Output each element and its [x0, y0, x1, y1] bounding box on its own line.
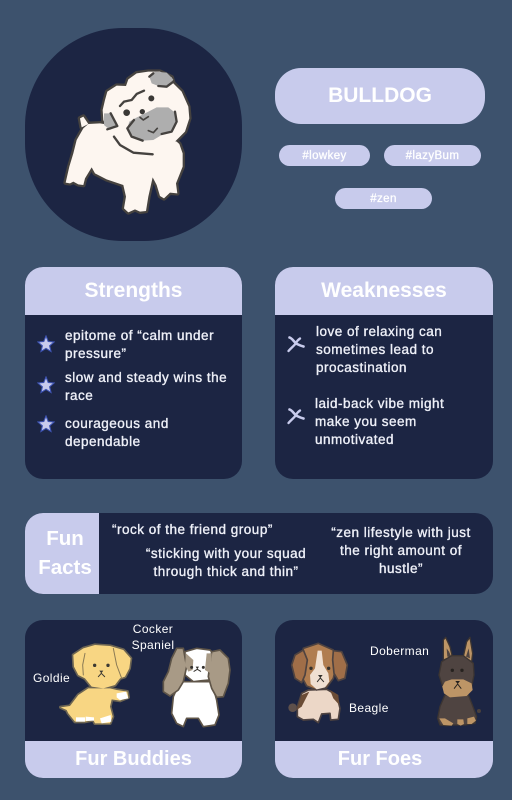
heading: weaknesses — [275, 267, 493, 315]
fact 3: “zen lifestyle with just — [331, 525, 471, 540]
heading: fur foes: Fur Foes — [338, 748, 422, 770]
icon: bulldog — [63, 69, 192, 215]
weakness 1: love of relaxing can — [316, 324, 442, 339]
heading: fur buddies — [25, 741, 242, 778]
icon: cross 2 — [287, 408, 305, 424]
icon: cocker spaniel — [162, 648, 231, 728]
strength 2: slow and steady wins the — [65, 370, 227, 385]
icon: doberman — [437, 636, 481, 726]
strength 2 — [65, 370, 227, 403]
tag: zen: #zen — [370, 193, 397, 205]
tag: lowkey: #lowkey — [302, 150, 347, 162]
hero panel: bulldog portrait — [25, 28, 242, 241]
weakness 2: laid-back vibe might — [315, 396, 444, 411]
fact 3: the right amount of — [340, 543, 462, 558]
heading: strengths: Strengths — [84, 279, 182, 302]
title pill — [275, 68, 485, 124]
heading: strengths — [25, 267, 242, 315]
strength 3: courageous and — [65, 416, 169, 431]
icon: star 1 — [37, 335, 55, 352]
strength 3 — [65, 416, 169, 450]
weakness 2: make you seem — [315, 414, 417, 429]
panel: weaknesses — [275, 267, 493, 479]
label: doberman: Doberman — [370, 644, 429, 658]
title: BULLDOG — [328, 84, 432, 107]
heading: weaknesses: Weaknesses — [321, 279, 447, 302]
fact 2: “sticking with your squad — [146, 546, 306, 561]
heading: fun facts: Fun — [46, 527, 84, 550]
icon: cross 1 — [287, 336, 305, 352]
panel: fur buddies — [25, 620, 242, 778]
fact 3: hustle” — [379, 561, 423, 576]
label: cocker spaniel: Spaniel — [132, 638, 174, 652]
fact 3 — [331, 525, 471, 576]
panel: fur foes — [275, 620, 493, 778]
tag: zen — [335, 188, 432, 209]
heading: fun facts — [25, 513, 99, 594]
panel: strengths — [25, 267, 242, 479]
strength 3: dependable — [65, 434, 141, 449]
weakness 2: unmotivated — [315, 432, 394, 447]
tag: lazyBum: #lazyBum — [406, 150, 459, 162]
weakness 1 — [316, 324, 442, 376]
strength 1: epitome of “calm under — [65, 328, 214, 343]
icon: beagle — [288, 642, 348, 724]
label: goldie: Goldie — [33, 671, 70, 685]
weakness 1: procastination — [316, 360, 407, 375]
fact 2 — [146, 546, 306, 580]
panel: fun facts — [25, 513, 493, 594]
heading: fur buddies: Fur Buddies — [75, 748, 192, 770]
tag: lazyBum — [384, 145, 481, 166]
label: beagle: Beagle — [349, 701, 389, 715]
icon: golden retriever — [59, 643, 132, 725]
heading: fun facts: Facts — [38, 556, 92, 579]
strength 1 — [65, 328, 214, 362]
strength 1: pressure” — [65, 346, 127, 361]
weakness 2 — [315, 396, 444, 447]
heading: fur foes — [275, 741, 493, 778]
icon: star 2 — [37, 376, 55, 394]
label: cocker spaniel: Cocker — [133, 622, 173, 636]
fact 1: “rock of the friend group” — [112, 522, 273, 537]
weakness 1: sometimes lead to — [316, 342, 434, 357]
tag: lowkey — [279, 145, 370, 166]
label: cocker spaniel — [132, 622, 174, 652]
strength 2: race — [65, 388, 93, 403]
icon: star 3 — [37, 415, 55, 432]
fact 2: through thick and thin” — [153, 564, 299, 579]
